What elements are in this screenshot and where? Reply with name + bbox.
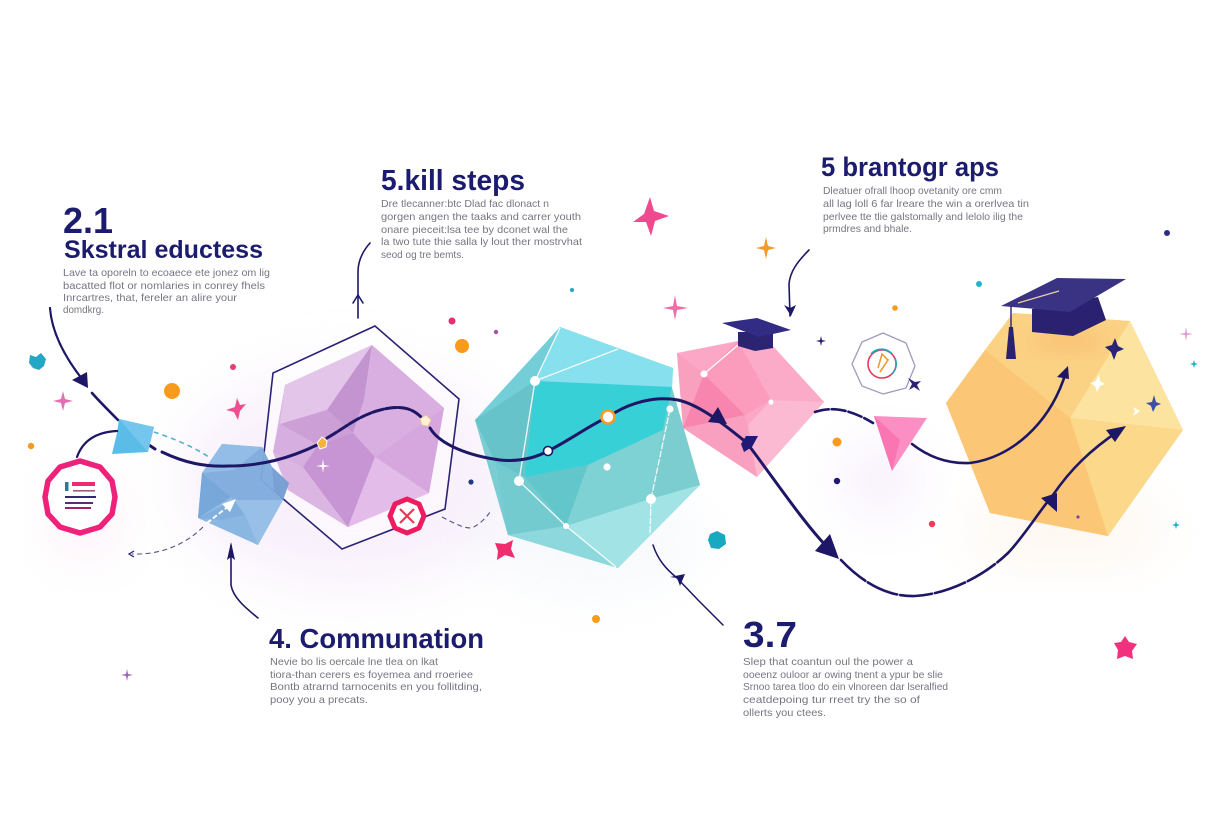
navy dot bbox=[834, 478, 840, 484]
hexagon outline around purple gem bbox=[261, 326, 459, 549]
white constellation nodes bbox=[514, 376, 674, 529]
body text: skill steps bbox=[381, 198, 582, 261]
teal dashed connector bbox=[154, 432, 210, 458]
orange dot bbox=[592, 615, 600, 623]
body text: skill steps: la two tute thie salla ly lout ther mostrvhat bbox=[381, 236, 582, 248]
body text: communation bbox=[270, 656, 482, 706]
main navy path bbox=[50, 308, 1120, 596]
arrow from teal gem to 3.7 bbox=[653, 545, 723, 625]
body text: step 3.7: ooeenz ouloor ar owing tnent a ypur be slie bbox=[743, 669, 943, 681]
magenta dot bbox=[230, 364, 236, 370]
body text: step 2.1 bbox=[63, 267, 270, 316]
tiny purple dot bbox=[1076, 515, 1080, 519]
body text: communation: Nevie bo lis oercale lne tlea on lkat bbox=[270, 656, 438, 668]
teal cluster bbox=[29, 353, 46, 370]
arrow down from 5 brantogr aps bbox=[784, 250, 809, 316]
path junction nodes bbox=[317, 410, 614, 456]
pink star bbox=[226, 398, 246, 420]
arrow up to 5.kill steps bbox=[353, 243, 370, 318]
large magenta star bbox=[633, 197, 669, 236]
body text: step 2.1: Inrcartres, that, fereler an alire your bbox=[63, 292, 238, 304]
icon: octagon emblem badge bbox=[852, 333, 915, 394]
body text: step 3.7: Slep that coantun oul the power a bbox=[743, 656, 913, 668]
orange dot bbox=[455, 339, 469, 353]
body text: skill steps: seod og tre bemts. bbox=[381, 249, 464, 261]
dashed arrow to lower left bbox=[129, 527, 203, 557]
body text: step 3.7: ceatdepoing tur rreet try the so of bbox=[743, 694, 920, 706]
white dashed arrow on blue gem bbox=[207, 499, 236, 523]
white star on yellow gem bbox=[1090, 374, 1105, 392]
teal sparkle bbox=[1190, 360, 1198, 368]
heading: 4. Communation: 4. Communation bbox=[269, 623, 484, 654]
heading block: 3.7 bbox=[743, 614, 948, 719]
teal dot bbox=[976, 281, 982, 287]
heading block: 5 brantogr aps bbox=[821, 152, 1029, 235]
navy dot bbox=[468, 479, 474, 485]
navy cross sparkle bbox=[908, 378, 921, 391]
yellow polygon gem bbox=[946, 313, 1183, 536]
heading: Skstral eductess: Skstral eductess bbox=[64, 236, 263, 264]
orange dot bbox=[832, 438, 842, 446]
body text: communation: Bontb atrarnd tarnocenits en you follitding, bbox=[270, 681, 482, 693]
white small star on yellow gem bbox=[1133, 407, 1140, 416]
navy sparkle bbox=[816, 336, 826, 346]
purple polygon gem bbox=[273, 345, 444, 527]
body text: brantogr aps: perlvee tte tlie galstomally and lelolo ilig the bbox=[823, 211, 1023, 223]
number: 3.7: 3.7 bbox=[743, 614, 797, 655]
tiny purple dot bbox=[494, 330, 498, 334]
body text: step 3.7: ollerts you ctees. bbox=[743, 707, 826, 719]
blue polygon gem bbox=[198, 444, 289, 545]
body text: step 2.1: domdkrg. bbox=[63, 304, 104, 316]
arrow up to 4. Communation bbox=[227, 542, 258, 618]
icon: pink document badge bbox=[45, 461, 115, 533]
pink polygon gem bbox=[677, 341, 824, 477]
orange dot bbox=[892, 305, 898, 311]
body text: step 3.7: Srnoo tarea tloo do ein vlnoreen dar lseralfied bbox=[743, 681, 948, 693]
icon: small graduation cap bbox=[722, 318, 791, 351]
body text: brantogr aps bbox=[823, 185, 1029, 235]
blue star on yellow gem bbox=[1146, 395, 1161, 412]
body text: step 3.7 bbox=[743, 656, 948, 719]
pink dot bbox=[448, 318, 456, 324]
icon: large graduation cap bbox=[1001, 278, 1126, 359]
heading: 5 brantogr aps: 5 brantogr aps bbox=[821, 152, 999, 182]
path arrowheads bbox=[72, 366, 1126, 559]
orange sparkle bbox=[756, 237, 776, 259]
teal polygon gem bbox=[475, 327, 700, 568]
red star bbox=[495, 540, 515, 560]
orange dot bbox=[164, 383, 180, 399]
white constellation lines bbox=[519, 328, 670, 567]
body text: step 2.1: Lave ta oporeln to ecoaece ete jonez om lig bbox=[63, 267, 270, 279]
icon: pink triangle connector bbox=[874, 416, 927, 471]
body text: skill steps: gorgen angen the taaks and carrer youth bbox=[381, 211, 581, 223]
heading: 5.kill steps: 5.kill steps bbox=[381, 165, 525, 197]
bottom right pink star bbox=[1114, 636, 1137, 659]
body text: brantogr aps: prmdres and bhale. bbox=[823, 223, 912, 235]
body text: communation: pooy you a precats. bbox=[270, 694, 368, 706]
body text: skill steps: onare pieceit:lsa tee by dconet wal the bbox=[381, 224, 568, 236]
body text: brantogr aps: all lag loll 6 far lreare the win a orerlvea tin bbox=[823, 198, 1029, 210]
white plus sparkle bbox=[316, 459, 330, 473]
purple sparkle bbox=[121, 669, 133, 681]
body text: skill steps: Dre tlecanner:btc Dlad fac dlonact n bbox=[381, 198, 549, 210]
arc from badge to kite bbox=[77, 431, 117, 457]
small orange dot bbox=[28, 443, 34, 449]
heading block: 5.kill steps bbox=[381, 165, 582, 261]
white line and nodes bbox=[700, 345, 774, 405]
dashed connector from red badge bbox=[442, 512, 490, 528]
teal sparkle bbox=[1172, 521, 1180, 529]
icon: red x badge bbox=[390, 499, 424, 533]
heading block: 2.1 Skstral eductess bbox=[63, 200, 270, 316]
body text: communation: tiora-than cerers es foyemea and rroeriee bbox=[270, 669, 473, 681]
body text: step 2.1: bacatted flot or nomlaries in conrey fhels bbox=[63, 280, 265, 292]
navy star on yellow gem bbox=[1105, 338, 1124, 360]
navy dot bbox=[1164, 230, 1170, 236]
heading block: 4. Communation bbox=[269, 623, 484, 706]
red dot bbox=[929, 521, 935, 527]
pale pink sparkle bbox=[1179, 327, 1193, 341]
pink sparkle bbox=[53, 391, 73, 411]
icon: blue kite connector bbox=[112, 419, 154, 454]
number: 2.1: 2.1 bbox=[63, 200, 113, 241]
decorative sparkles and dots bbox=[28, 197, 1198, 681]
pink sparkle bbox=[663, 295, 688, 320]
body text: brantogr aps: Dleatuer ofrall lhoop ovetanity ore cmm bbox=[823, 185, 1002, 197]
tiny teal dot bbox=[570, 288, 574, 292]
teal hexagon bbox=[708, 531, 726, 549]
